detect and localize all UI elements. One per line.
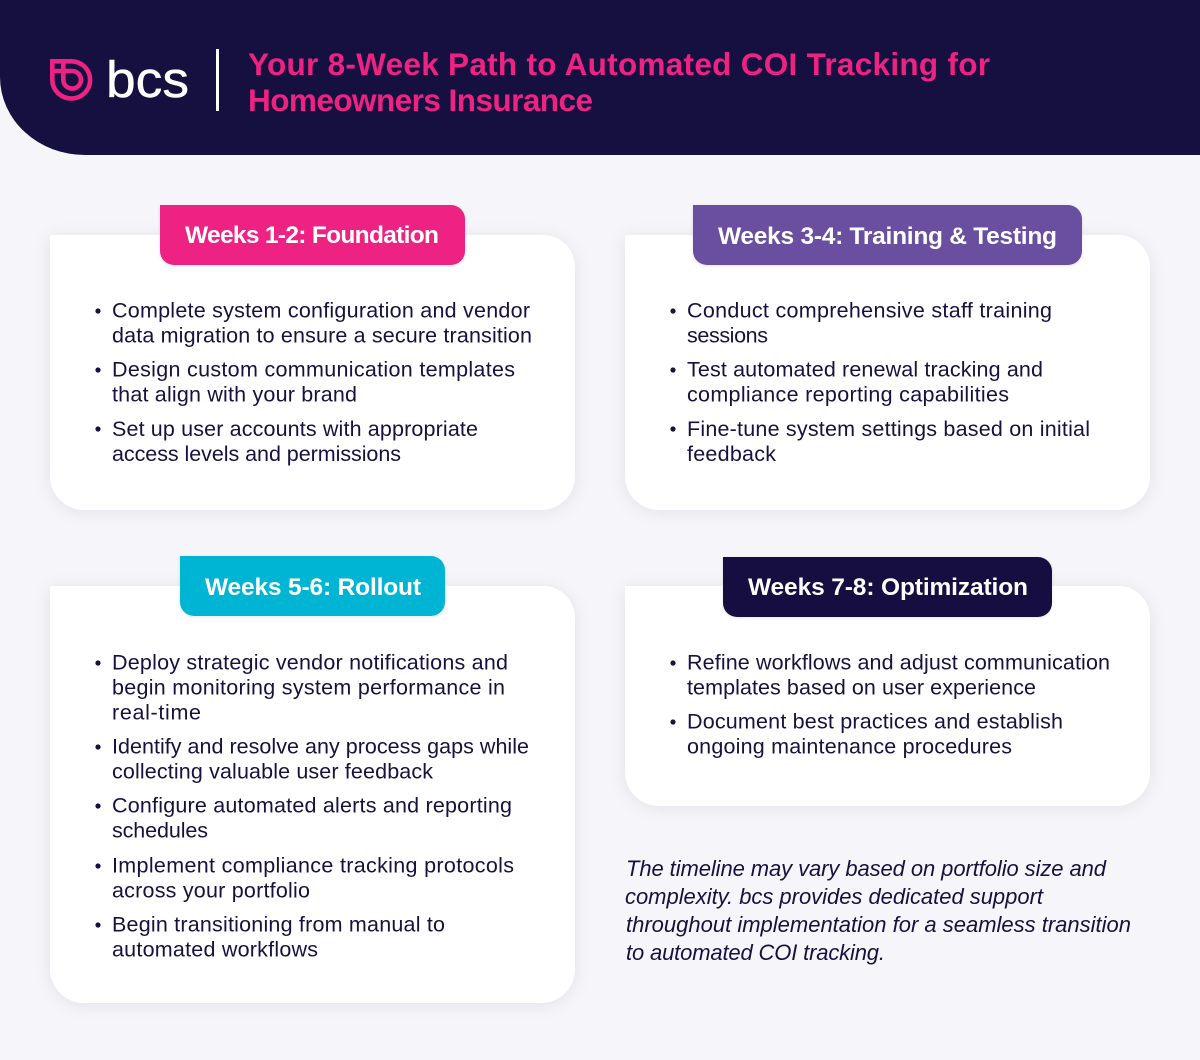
bullet list: rollout: Deploy strategic vendor notifications and [112, 650, 508, 674]
bullet list: rollout: collecting valuable user feedback [112, 760, 433, 784]
bullet list: rollout: Identify and resolve any process gaps while [112, 734, 529, 758]
panel: weeks 1-2 foundation [50, 205, 575, 510]
bullet list: training and testing: sessions [687, 324, 768, 348]
header banner [0, 0, 1200, 155]
bullet list: optimization [670, 650, 1110, 758]
bullet list: foundation: access levels and permissions [112, 442, 401, 466]
title [248, 46, 990, 118]
icon: bcs logo mark [52, 61, 90, 98]
bullet list: training and testing: Conduct comprehensive staff training [687, 298, 1052, 322]
title: Your 8-Week Path to Automated COI Tracking for [248, 46, 990, 82]
heading pill: weeks 3-4: Weeks 3-4: Training & Testing [718, 223, 1057, 250]
title: Homeowners Insurance [248, 82, 593, 118]
closing note: The timeline may vary based on portfolio size and [626, 856, 1107, 881]
header divider [216, 49, 219, 111]
bullet list: optimization: ongoing maintenance procedures [687, 734, 1012, 758]
heading pill: weeks 3-4 [693, 205, 1082, 265]
bullet list: foundation: Design custom communication templates [112, 358, 515, 382]
bullet list: rollout: across your portfolio [112, 878, 310, 902]
bullet list: rollout [95, 650, 529, 962]
panel: weeks 7-8 optimization [625, 557, 1150, 806]
bullet list: rollout: Begin transitioning from manual to [112, 912, 445, 936]
bullet list: training and testing: Fine-tune system settings based on initial [687, 417, 1090, 441]
bullet list: foundation: that align with your brand [112, 382, 357, 406]
bullet list: optimization: Refine workflows and adjust communication [687, 650, 1110, 674]
bullet list: foundation: data migration to ensure a secure transition [112, 324, 532, 348]
bullet list: optimization: templates based on user experience [687, 676, 1036, 700]
bullet list: optimization: Document best practices and establish [687, 710, 1063, 734]
bullet list: training and testing: feedback [687, 442, 776, 466]
bullet list: rollout: real-time [112, 700, 201, 724]
bullet list: training and testing [670, 298, 1090, 466]
heading pill: weeks 1-2: Weeks 1-2: Foundation [185, 222, 439, 249]
bullet list: training and testing: Test automated renewal tracking and [687, 358, 1043, 382]
bullet list: rollout: automated workflows [112, 938, 318, 962]
closing note [625, 856, 1131, 965]
bullet list: foundation: Complete system configuration and vendor [112, 298, 530, 322]
closing note: complexity. bcs provides dedicated support [625, 884, 1044, 909]
closing note: to automated COI tracking. [626, 940, 885, 965]
heading pill: weeks 1-2 [160, 205, 465, 265]
bullet list: rollout: schedules [112, 818, 208, 842]
bullet list: foundation: Set up user accounts with appropriate [112, 417, 478, 441]
bullet list: rollout: begin monitoring system performance in [112, 676, 505, 700]
bullet list: rollout: Configure automated alerts and reporting [112, 794, 512, 818]
heading pill: weeks 5-6: Weeks 5-6: Rollout [205, 574, 421, 601]
logo wordmark: bcs [106, 51, 189, 108]
panel: weeks 3-4 training and testing [625, 205, 1150, 510]
bullet list: training and testing: compliance reporting capabilities [687, 382, 1009, 406]
panel: weeks 5-6 rollout [50, 556, 575, 1003]
bullet list: rollout: Implement compliance tracking protocols [112, 854, 514, 878]
heading pill: weeks 7-8 [723, 557, 1052, 617]
closing note: throughout implementation for a seamless transition [626, 912, 1131, 937]
heading pill: weeks 5-6 [180, 556, 445, 616]
bullet list: foundation [95, 298, 532, 466]
heading pill: weeks 7-8: Weeks 7-8: Optimization [748, 574, 1028, 601]
